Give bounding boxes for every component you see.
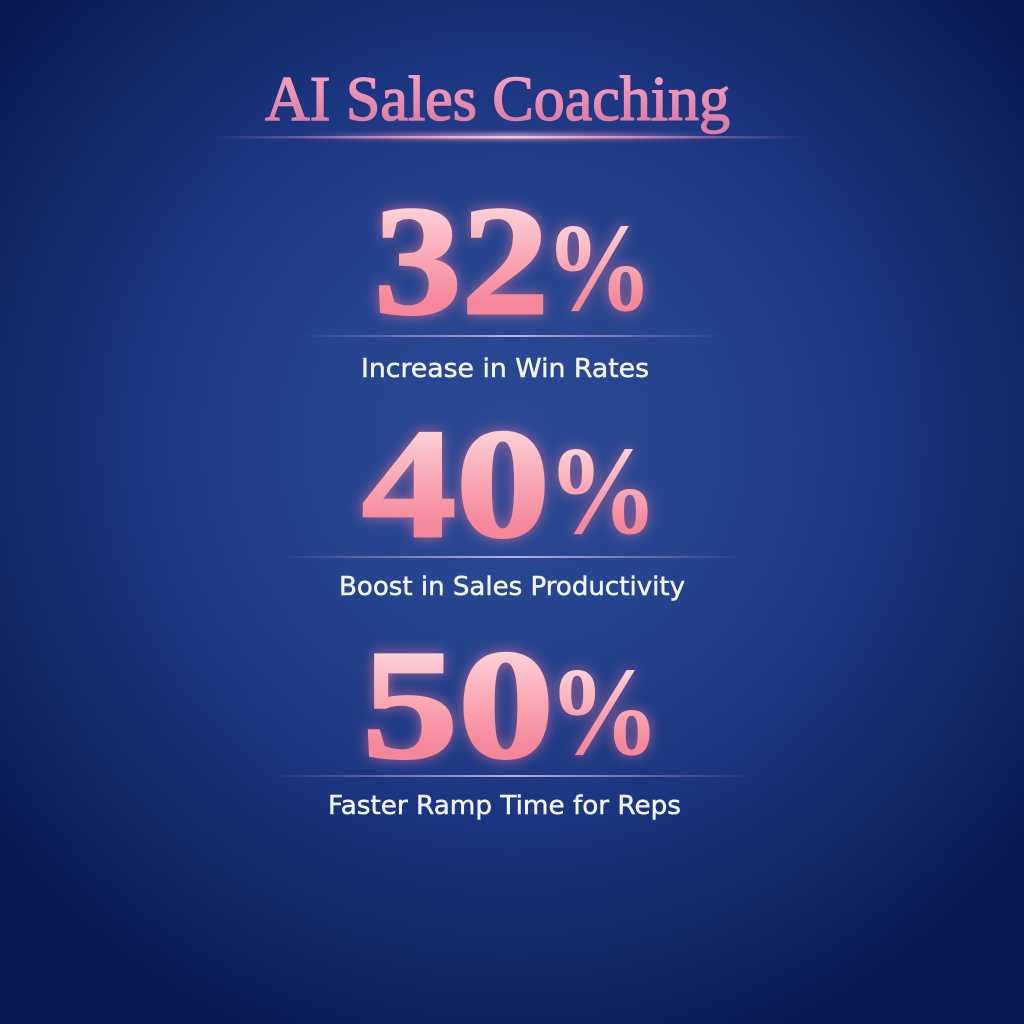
title: AI Sales Coaching	[265, 63, 730, 134]
label: Boost in Sales Productivity	[339, 572, 685, 602]
divider	[300, 335, 724, 337]
label: Increase in Win Rates	[361, 354, 649, 384]
label: Faster Ramp Time for Reps	[328, 791, 681, 821]
number 40: 40	[362, 397, 550, 570]
number 32: 32	[374, 174, 549, 347]
stat: 50%	[270, 618, 754, 821]
title underline	[215, 133, 805, 140]
percent sign: %	[548, 643, 660, 782]
stat: 32%	[300, 174, 724, 384]
divider	[270, 775, 754, 777]
stat: 40%	[280, 397, 744, 602]
number 50: 50	[362, 618, 554, 791]
divider	[280, 556, 744, 558]
percent sign: %	[545, 199, 653, 338]
percent sign: %	[547, 422, 658, 561]
